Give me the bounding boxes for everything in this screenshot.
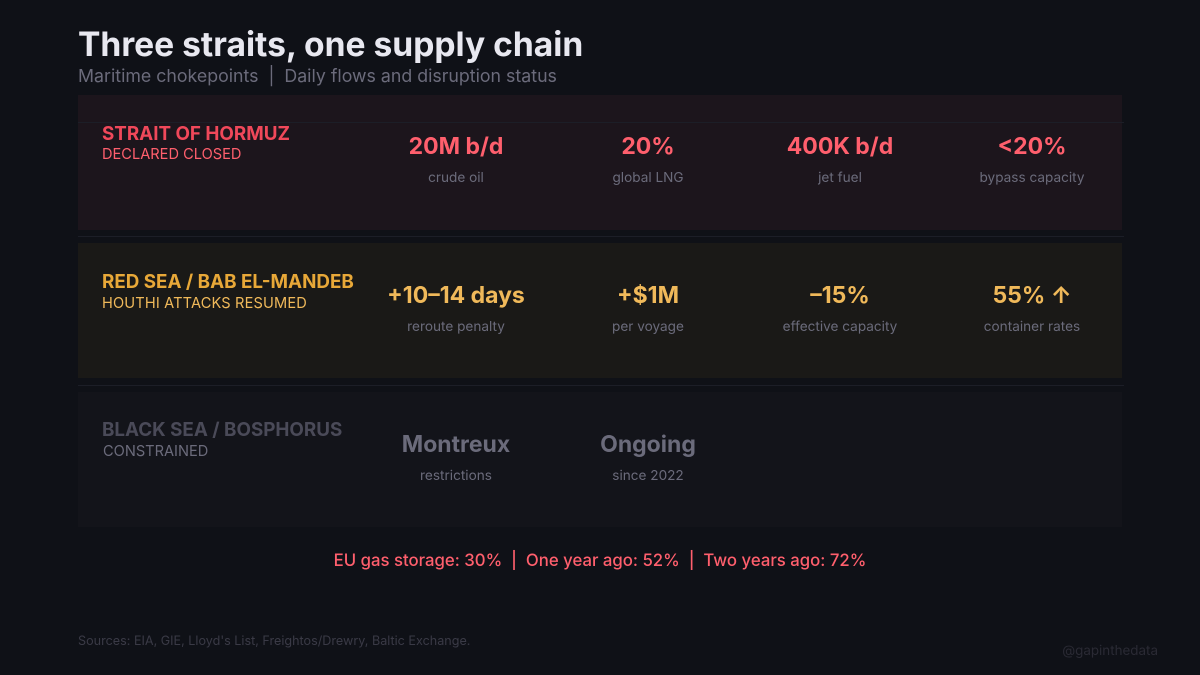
metric: per voyage	[612, 281, 684, 335]
title: Three straits, one supply chain	[78, 24, 583, 65]
panel: Black Sea / Bosphorus	[78, 392, 1122, 527]
metric: reroute penalty: reroute penalty	[407, 319, 505, 335]
callout: EU gas storage: EU gas storage: 30% | One year ago: 52% | Two years ago: 72%	[334, 551, 866, 571]
metric: bypass capacity: bypass capacity	[980, 170, 1084, 186]
metric: per voyage: +$1M	[617, 281, 679, 309]
metric: effective capacity: effective capacity	[783, 319, 897, 335]
strait name: Black Sea: BLACK SEA / BOSPHORUS	[102, 418, 342, 441]
panel: Red Sea / Bab el-Mandeb	[78, 243, 1122, 378]
metric: bypass capacity: <20%	[998, 132, 1066, 160]
status: Houthi attacks resumed: HOUTHI ATTACKS RESUMED	[102, 294, 307, 312]
metric: container rates	[984, 281, 1080, 335]
metric: jet fuel	[787, 132, 893, 186]
status: constrained: CONSTRAINED	[103, 442, 208, 460]
strait name: Hormuz: STRAIT OF HORMUZ	[102, 122, 290, 145]
metric: Montreux restrictions: restrictions	[420, 468, 492, 484]
metric: Montreux restrictions	[402, 430, 510, 484]
sources: Sources: EIA, GIE, Lloyd's List, Freightos/Drewry, Baltic Exchange.	[78, 634, 470, 649]
metric: bypass capacity	[980, 132, 1084, 186]
metric: effective capacity: –15%	[810, 281, 870, 309]
metric: container rates: container rates	[984, 319, 1080, 335]
metric: ongoing since 2022: Ongoing	[600, 430, 696, 458]
metric: jet fuel: jet fuel	[818, 170, 862, 186]
credit: @gapinthedata	[1062, 643, 1158, 659]
status: declared closed: DECLARED CLOSED	[102, 145, 241, 163]
metric: global LNG: 20%	[621, 132, 675, 160]
metric: container rates: 55% ↑	[992, 281, 1072, 309]
metric: ongoing since 2022	[600, 430, 696, 484]
metric: global LNG: global LNG	[612, 170, 684, 186]
metric: reroute penalty: +10–14 days	[387, 281, 525, 309]
metric: Montreux restrictions: Montreux	[402, 430, 510, 458]
strait name: Red Sea: RED SEA / BAB EL-MANDEB	[102, 270, 354, 293]
metric: global LNG	[612, 132, 684, 186]
metric: effective capacity	[783, 281, 897, 335]
metric: per voyage: per voyage	[612, 319, 684, 335]
metric: crude oil: crude oil	[428, 170, 484, 186]
metric: jet fuel: 400K b/d	[787, 132, 893, 160]
metric: crude oil	[409, 132, 503, 186]
subtitle: Maritime chokepoints | Daily flows and disruption status	[78, 66, 557, 87]
metric: crude oil: 20M b/d	[409, 132, 503, 160]
metric: ongoing since 2022: since 2022	[612, 468, 684, 484]
panel: Strait of Hormuz	[78, 95, 1122, 230]
metric: reroute penalty	[387, 281, 525, 335]
